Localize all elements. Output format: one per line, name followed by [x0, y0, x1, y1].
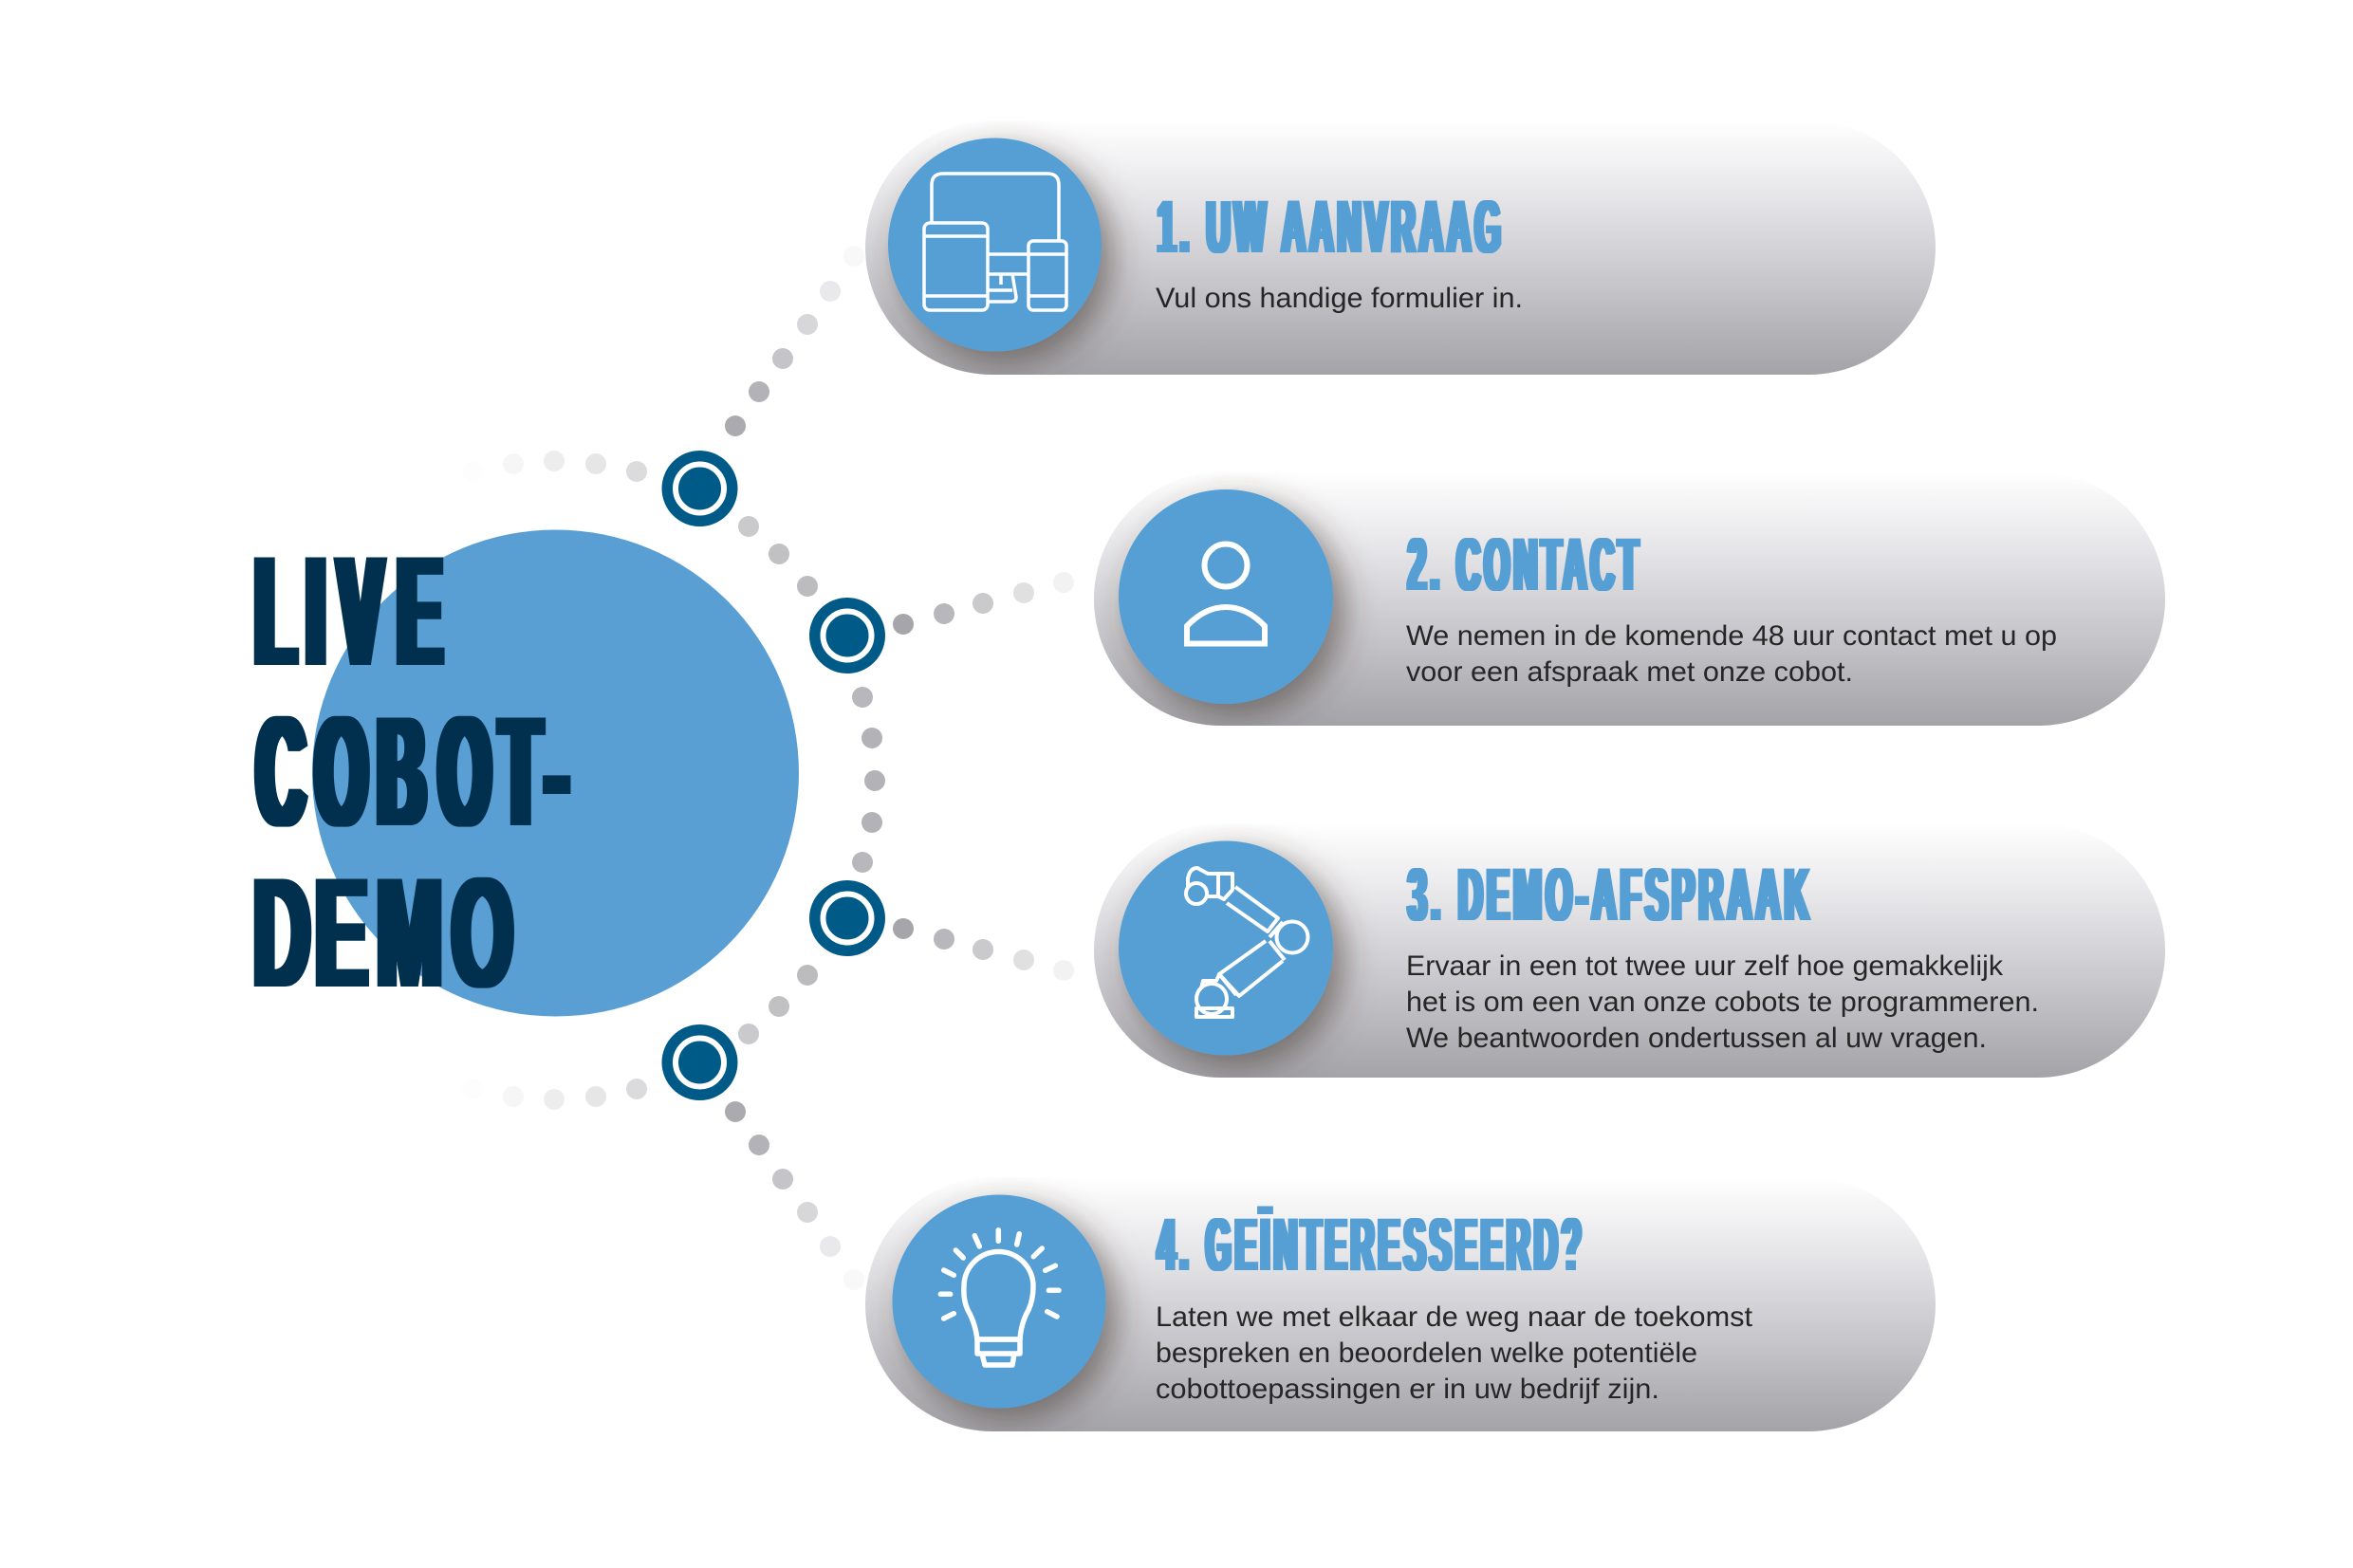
node 3 [809, 880, 885, 956]
text: step 1: Vul ons handige formulier in. [1156, 283, 1523, 314]
node 4 [662, 1024, 738, 1100]
title: LIVE [255, 523, 441, 698]
icon circle: step 3 [1119, 840, 1333, 1055]
panel: step 1 [865, 120, 1936, 375]
icon: person [1187, 544, 1265, 643]
panel: step 2 [1094, 472, 2165, 726]
icon circle: step 1 [888, 138, 1102, 351]
panel: step 3: 3. DEMO-AFSPRAAK [1408, 853, 1813, 936]
panel: step 1: 1. UW AANVRAAG [1158, 185, 1505, 268]
title: COBOT- [257, 683, 567, 858]
node 2 [809, 598, 885, 673]
icon: robot arm [1186, 868, 1307, 1017]
panel: step 4: 4. GEÏNTERESSEERD? [1158, 1203, 1585, 1286]
text: step 2 [1406, 620, 2057, 688]
panel: step 3 [1094, 823, 2165, 1078]
connector dots [462, 246, 1074, 1290]
panel: step 2: 2. CONTACT [1408, 523, 1642, 606]
text: step 3: We beantwoorden ondertussen al uw vragen. [1406, 1023, 1987, 1054]
node 1 [662, 451, 738, 526]
icon circle: step 2 [1119, 489, 1333, 704]
panel: step 4 [865, 1177, 1936, 1431]
icon circle: step 4 [892, 1195, 1106, 1408]
text: step 4: Laten we met elkaar de weg naar de toekomst [1156, 1301, 1753, 1333]
icon: light bulb [940, 1230, 1059, 1365]
icon: devices [924, 174, 1066, 310]
text: step 3: Ervaar in een tot twee uur zelf hoe gemakkelijk [1406, 950, 2004, 982]
text: step 4: cobottoepassingen er in uw bedrijf zijn. [1156, 1374, 1659, 1405]
large blue circle [312, 529, 799, 1017]
text: step 4: bespreken en beoordelen welke potentiële [1156, 1337, 1697, 1369]
text: step 3: het is om een van onze cobots te programmeren. [1406, 987, 2039, 1018]
title [253, 523, 567, 1020]
title: DEMO [253, 845, 512, 1020]
text: step 2: We nemen in de komende 48 uur contact met u op [1406, 620, 2057, 652]
text: step 2: voor een afspraak met onze cobot. [1406, 656, 1853, 688]
text: step 4 [1156, 1301, 1753, 1405]
text: step 3 [1406, 950, 2039, 1054]
